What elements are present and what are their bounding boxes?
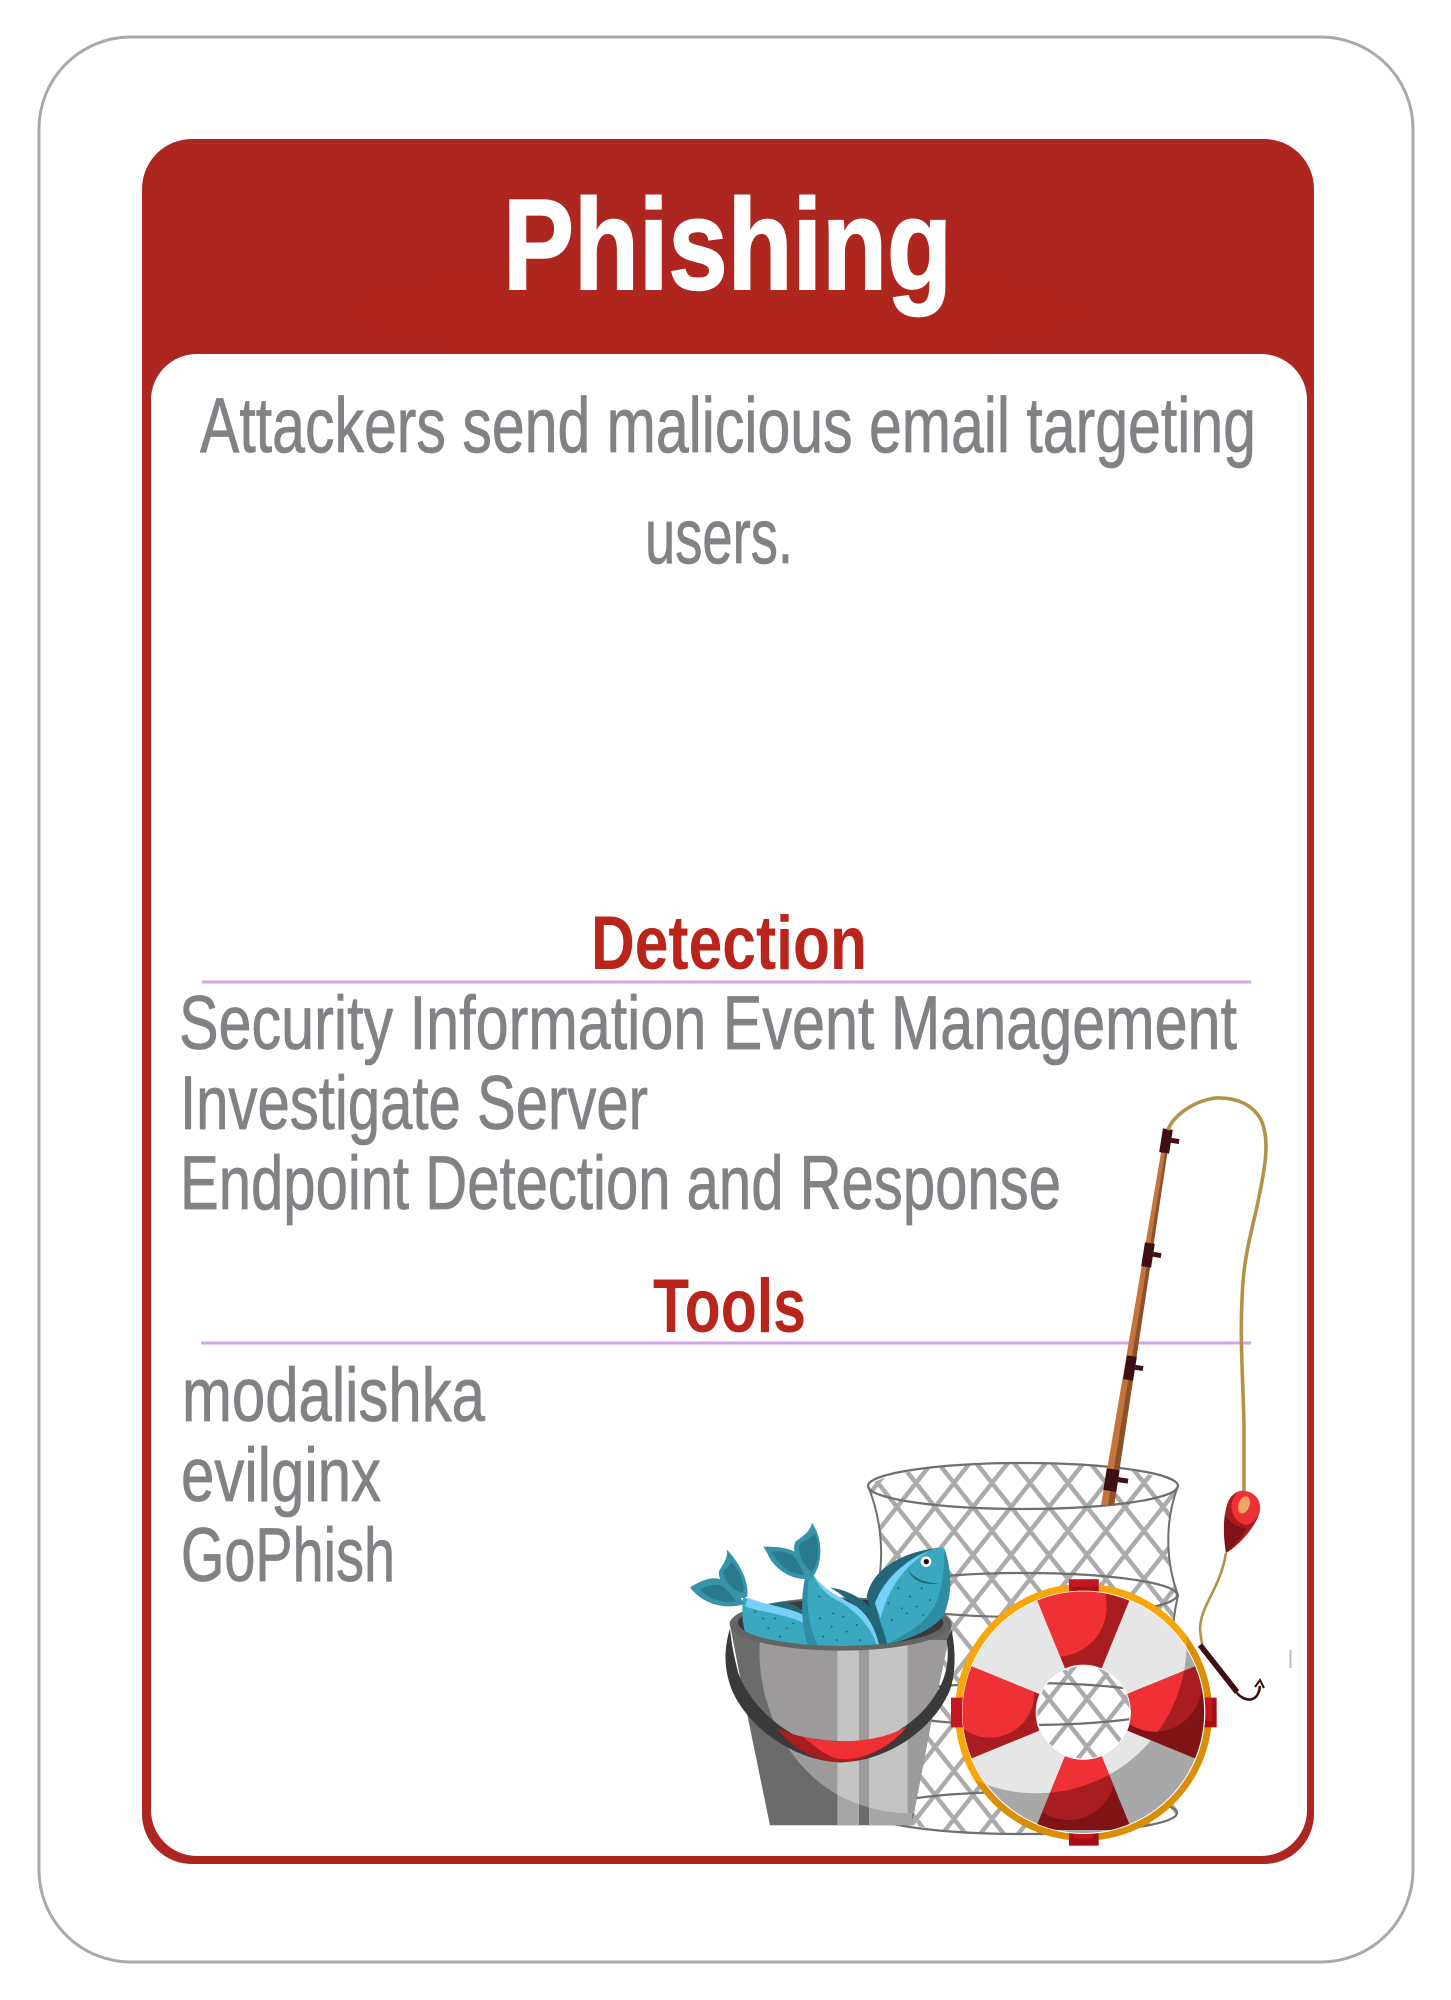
icon: fishing net	[868, 1463, 1178, 1834]
buoy ring	[959, 1587, 1209, 1837]
left fish	[770, 1602, 808, 1647]
buoy knobs	[951, 1579, 1217, 1846]
buoy right band	[1127, 1666, 1204, 1758]
fish spots	[754, 1587, 931, 1641]
tools list: evilginx	[181, 1433, 381, 1518]
bucket handle	[725, 1628, 955, 1762]
title: Phishing	[503, 173, 952, 317]
buoy bottom band	[1037, 1756, 1130, 1830]
bucket rim	[730, 1597, 952, 1651]
heading: Detection: Detection	[591, 901, 867, 986]
buoy top band	[1037, 1592, 1130, 1668]
detection divider	[202, 980, 1251, 984]
description text: users.	[645, 492, 793, 580]
description text	[200, 381, 1256, 580]
handle red grip	[777, 1727, 907, 1762]
bucket body	[727, 1623, 957, 1827]
icon: bucket with fish	[690, 1523, 957, 1827]
red card panel	[142, 139, 1314, 1864]
tools list: GoPhish	[181, 1513, 395, 1598]
detection list: Investigate Server	[180, 1061, 648, 1146]
buoy body	[963, 1592, 1204, 1833]
buoy left band	[962, 1666, 1040, 1758]
detection list	[179, 981, 1237, 1226]
right fish	[866, 1547, 943, 1624]
tools list: modalishka	[182, 1353, 486, 1438]
tools divider	[201, 1342, 1251, 1344]
tools list	[181, 1353, 486, 1598]
icon: life buoy	[946, 1557, 1217, 1846]
middle fish	[830, 1587, 887, 1647]
icon: fish hook	[1200, 1645, 1264, 1700]
icon: fishing rod	[1101, 1128, 1181, 1506]
small tick mark	[1290, 1650, 1292, 1668]
fish group	[690, 1523, 950, 1647]
icon: float	[1200, 1491, 1260, 1644]
detection list: Endpoint Detection and Response	[180, 1141, 1061, 1226]
heading: Tools: Tools	[653, 1264, 806, 1349]
icon: fishing line	[1168, 1098, 1266, 1491]
